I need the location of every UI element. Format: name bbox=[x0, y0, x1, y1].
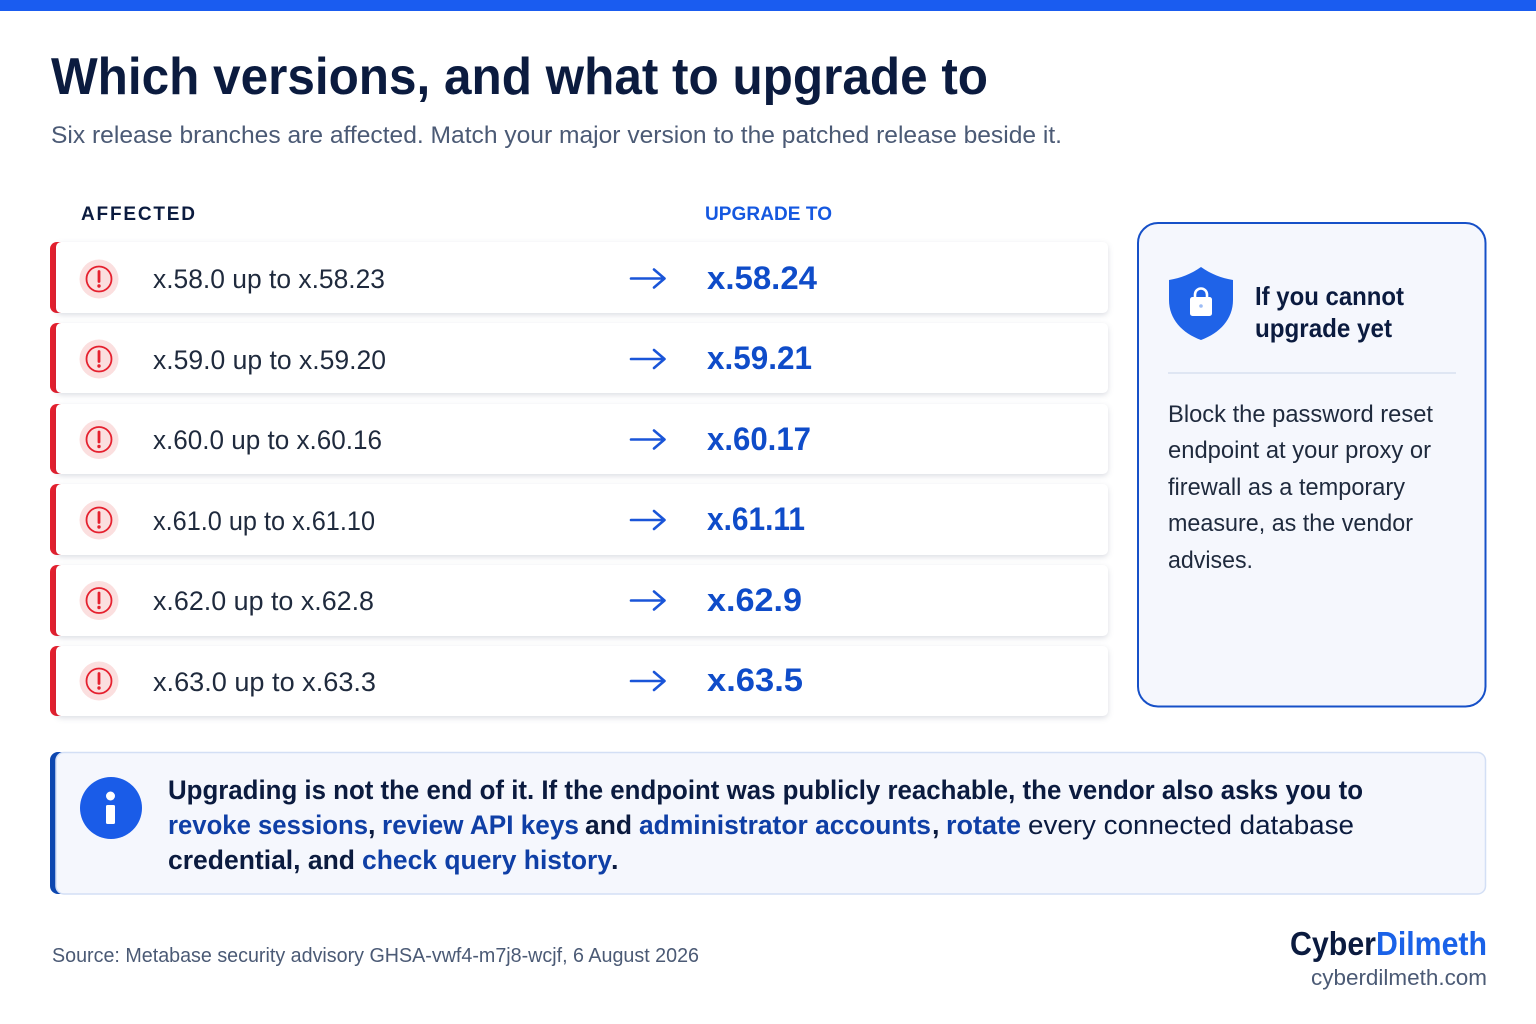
row: x.61: x.61.0 up to x.61.10 bbox=[153, 506, 375, 536]
column heading: upgrade to: UPGRADE TO bbox=[705, 204, 832, 225]
row: x.59: x.59.21 bbox=[707, 340, 812, 376]
callout text: every connected database bbox=[1028, 810, 1354, 840]
callout text: rotate bbox=[946, 810, 1021, 840]
row: x.59 bbox=[50, 323, 1108, 393]
row: x.60: x.60.0 up to x.60.16 bbox=[153, 425, 382, 455]
panel body text: endpoint at your proxy or bbox=[1168, 437, 1431, 464]
icon: info bbox=[80, 777, 142, 839]
callout: upgrading is not the end bbox=[50, 752, 1486, 894]
row: x.58: x.58.0 up to x.58.23 bbox=[153, 264, 385, 294]
row: x.63: x.63.0 up to x.63.3 bbox=[153, 667, 376, 697]
subtitle: Six release branches are affected. Match your major version to the patched release beside it. bbox=[51, 122, 1062, 149]
row: x.60: x.60.17 bbox=[707, 421, 811, 457]
callout text: check query history bbox=[362, 845, 612, 875]
panel heading: upgrade yet bbox=[1255, 313, 1392, 343]
top accent bar bbox=[0, 0, 1536, 11]
row: x.61: x.61.11 bbox=[707, 501, 805, 537]
callout text: credential, and bbox=[168, 845, 355, 875]
column heading: affected: AFFECTED bbox=[81, 204, 195, 225]
row: x.62 bbox=[50, 565, 1108, 636]
panel body text: Block the password reset bbox=[1168, 401, 1433, 428]
title: Which versions, and what to upgrade to bbox=[51, 48, 988, 106]
brand logo: cyberdilmeth.com bbox=[1311, 965, 1487, 990]
callout text: . bbox=[611, 845, 619, 875]
callout text: and bbox=[585, 810, 632, 840]
row: x.62: x.62.9 bbox=[707, 582, 802, 618]
callout text: , bbox=[932, 810, 940, 840]
panel heading bbox=[1255, 281, 1404, 343]
brand logo bbox=[1290, 925, 1487, 990]
row: x.59: x.59.0 up to x.59.20 bbox=[153, 345, 386, 375]
callout text: administrator accounts bbox=[639, 810, 931, 840]
brand logo: Cyber bbox=[1290, 925, 1376, 962]
row: x.63: x.63.5 bbox=[707, 662, 803, 698]
panel body text: measure, as the vendor bbox=[1168, 510, 1413, 537]
callout text: revoke sessions bbox=[168, 810, 368, 840]
source line: Source: Metabase security advisory GHSA-vwf4-m7j8-wcjf, 6 August 2026 bbox=[52, 945, 699, 967]
version table bbox=[50, 242, 1108, 716]
row: x.58 bbox=[50, 242, 1108, 313]
panel heading: If you cannot bbox=[1255, 281, 1404, 311]
row: x.62: x.62.0 up to x.62.8 bbox=[153, 586, 374, 616]
row: x.58: x.58.24 bbox=[707, 260, 817, 296]
callout text: , bbox=[368, 810, 376, 840]
row: x.63 bbox=[50, 646, 1108, 716]
callout text: review API keys bbox=[382, 810, 579, 840]
brand logo: Dilmeth bbox=[1376, 925, 1487, 962]
row: x.61 bbox=[50, 484, 1108, 555]
icon: shield with lock bbox=[1169, 267, 1233, 340]
panel body text: advises. bbox=[1168, 547, 1253, 574]
callout text: Upgrading is not the end of it. If the endpoint was publicly reachable, the vendor also asks you to bbox=[168, 775, 1363, 805]
panel body text bbox=[1168, 401, 1433, 574]
row: x.60 bbox=[50, 404, 1108, 474]
panel: if you cannot upgrade yet bbox=[1138, 223, 1486, 706]
callout text bbox=[168, 775, 1363, 875]
panel body text: firewall as a temporary bbox=[1168, 474, 1405, 501]
